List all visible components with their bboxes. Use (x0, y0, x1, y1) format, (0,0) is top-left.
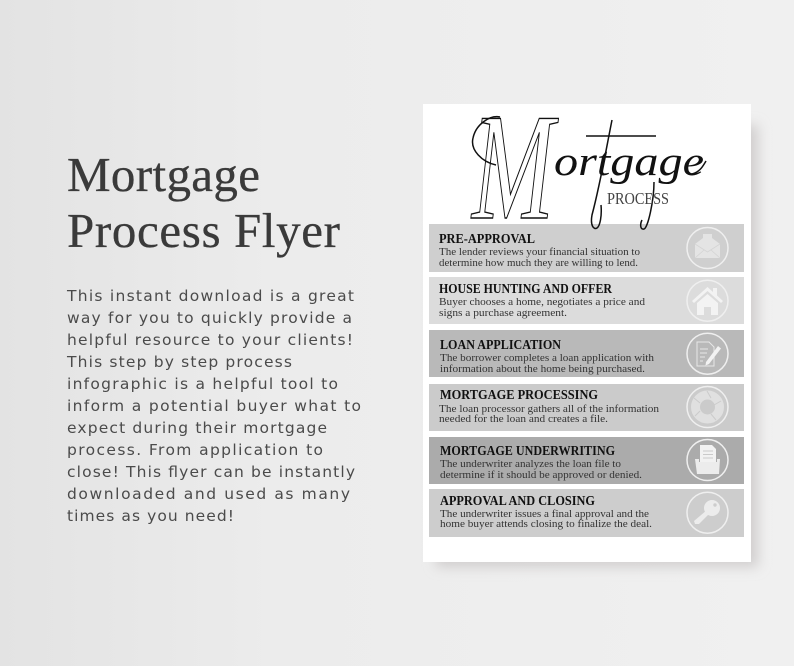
icon: house (687, 280, 728, 321)
flyer title: Mortgage script (471, 83, 706, 251)
description text block: way for you to quickly provide a (67, 309, 352, 327)
description text block (66, 287, 361, 525)
icon: folder and document (687, 440, 728, 480)
step 4: mortgage processing: The loan processor gathers all of the information (439, 403, 659, 415)
step 3: loan application: information about the home being purchased. (440, 363, 645, 375)
icon: envelope (687, 228, 728, 268)
step 6: approval and closing: The underwriter issues a final approval and the (440, 508, 649, 520)
step 5: mortgage underwriting: MORTGAGE UNDERWRITING (440, 443, 615, 458)
icon: form and pen (687, 333, 728, 374)
step 5: mortgage underwriting: The underwriter analyzes the loan file to (440, 458, 622, 470)
description text block: expect during their mortgage (67, 419, 327, 437)
description text block: This instant download is a great (66, 287, 354, 305)
step 1: pre-approval (429, 224, 744, 272)
step 5: mortgage underwriting (429, 437, 744, 484)
step 3: loan application: LOAN APPLICATION (440, 337, 561, 352)
step 3: loan application (429, 330, 744, 377)
step 4: mortgage processing: needed for the loan and creates a file. (439, 413, 608, 425)
step 1: pre-approval: determine how much they are willing to lend. (439, 257, 638, 269)
description text block: process. From application to (67, 441, 323, 459)
step 4: mortgage processing: MORTGAGE PROCESSING (440, 387, 598, 402)
step 2: house hunting and offer: Buyer chooses a home, negotiates a price and (439, 296, 646, 308)
heading: Mortgage Process Flyer (67, 147, 340, 258)
heading: Mortgage Process Flyer: Process Flyer (67, 203, 340, 258)
description text block: downloaded and used as many (67, 485, 350, 503)
icon: key (687, 492, 728, 533)
step 6: approval and closing: APPROVAL AND CLOSING (440, 493, 595, 508)
step 1: pre-approval: The lender reviews your financial situation to (439, 246, 640, 258)
description text block: This step by step process (66, 353, 292, 371)
description text block: times as you need! (67, 507, 234, 525)
flyer page shadow (436, 125, 758, 567)
description text block: infographic is a helpful tool to (67, 375, 338, 393)
flyer subtitle: PROCESS: PROCESS (607, 189, 669, 208)
description text block: close! This flyer can be instantly (67, 463, 355, 481)
flyer title: Mortgage script: ortgage (554, 138, 704, 184)
step 2: house hunting and offer: signs a purchase agreement. (439, 307, 567, 319)
step 6: approval and closing (429, 489, 744, 537)
step 4: mortgage processing (429, 384, 744, 431)
icon: circular arrows (687, 386, 728, 428)
description text block: inform a potential buyer what to (67, 397, 361, 415)
step 3: loan application: The borrower completes a loan application with (440, 352, 655, 364)
heading: Mortgage Process Flyer: Mortgage (67, 147, 260, 202)
step 5: mortgage underwriting: determine if it should be approved or denied. (440, 469, 642, 481)
step 1: pre-approval: PRE-APPROVAL (439, 231, 535, 246)
panel: flyer page (423, 83, 751, 562)
step 6: approval and closing: home buyer attends closing to finalize the deal. (440, 518, 652, 530)
step 2: house hunting and offer: HOUSE HUNTING AND OFFER (439, 281, 612, 296)
flyer title: Mortgage script: M (471, 83, 559, 251)
description text block: helpful resource to your clients! (67, 331, 353, 349)
step 2: house hunting and offer (429, 277, 744, 324)
